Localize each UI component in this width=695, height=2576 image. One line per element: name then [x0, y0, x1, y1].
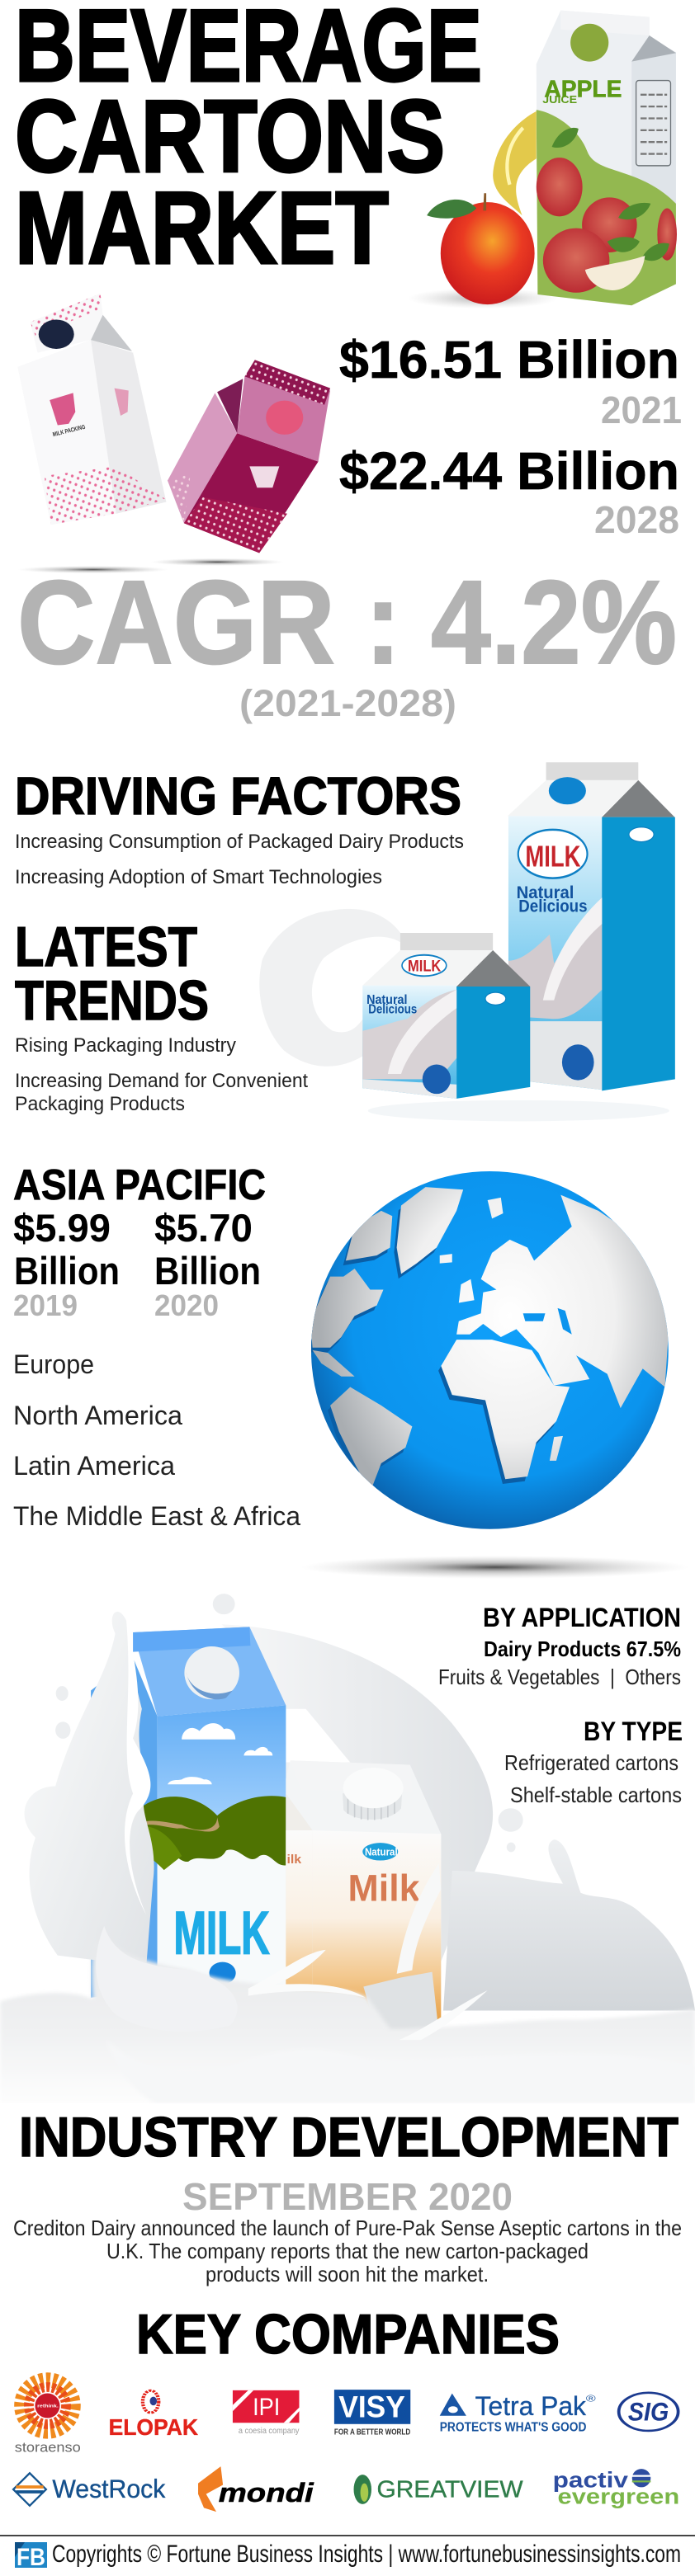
by application: [438, 1603, 681, 1689]
logo: IPI: a coesia company: [239, 2426, 299, 2435]
logo: SIG: [619, 2393, 678, 2431]
by type: [504, 1717, 683, 1807]
logo: Elopak: ELOPAK: [109, 2415, 198, 2441]
logo: Greatview: GREATVIEW: [376, 2476, 523, 2503]
value 2028: 2028: [594, 498, 679, 541]
logo: WestRock: WestRock: [52, 2475, 166, 2503]
asia pacific: [13, 1161, 266, 1322]
illustration: milk cartons in splash: [0, 1594, 695, 2103]
logo: Visy: FOR A BETTER WORLD: [334, 2428, 410, 2437]
logo: Tetra Pak: Tetra Pak: [475, 2390, 586, 2421]
illustration: milk cartons in splash: MILK: [174, 1899, 270, 1967]
value 2021: [339, 330, 682, 431]
latest trends: Rising Packaging Industry: [15, 1034, 236, 1057]
driving factors: Increasing Adoption of Smart Technologies: [15, 866, 382, 888]
driving factors: Increasing Consumption of Packaged Dairy Products: [15, 831, 464, 853]
logo: Stora Enso: [15, 2380, 81, 2455]
logo: Pactiv Evergreen: [553, 2468, 679, 2509]
driving factors: [15, 766, 464, 888]
logo: Stora Enso: storaenso: [15, 2441, 81, 2455]
latest trends: Increasing Demand for Convenient: [15, 1070, 308, 1092]
regions list: The Middle East & Africa: [13, 1501, 300, 1531]
illustration: apple juice carton: [408, 11, 677, 308]
value 2021: $16.51 Billion: [339, 330, 679, 389]
logo: WestRock: [13, 2473, 166, 2506]
globe shadow: [301, 1556, 689, 1579]
company logos: [13, 2380, 679, 2512]
illustration: milk cartons and splash: Natural: [517, 883, 574, 902]
driving factors: DRIVING FACTORS: [15, 766, 461, 826]
development text: products will soon hit the market.: [206, 2262, 489, 2286]
logo: SIG: SIG: [628, 2398, 669, 2427]
illustration: apple juice carton: JUICE: [542, 94, 577, 106]
illustration: white milk carton: [17, 294, 168, 573]
illustration: milk cartons and splash: MILK: [408, 957, 442, 975]
value 2020: Billion: [154, 1249, 261, 1293]
value 2028: $22.44 Billion: [339, 441, 679, 501]
logo: Elopak: [109, 2390, 198, 2441]
latest trends: [15, 916, 308, 1115]
title: [15, 0, 482, 285]
illustration: milk cartons and splash: Delicious: [368, 1002, 417, 1016]
regions list: Europe: [13, 1349, 94, 1379]
value 2019: $5.99: [13, 1206, 111, 1250]
illustration: milk cartons and splash: Natural: [366, 992, 408, 1006]
logo: Tetra Pak: ®: [586, 2393, 596, 2404]
logo: IPI: IPI: [253, 2393, 280, 2420]
logo: Greatview: [354, 2475, 523, 2504]
value 2020: [154, 1206, 261, 1322]
logo: Mondi: [198, 2466, 314, 2512]
title: CARTONS: [15, 80, 445, 194]
globe: [308, 1171, 669, 1529]
illustration: milk cartons and splash: Delicious: [518, 897, 588, 916]
latest trends: TRENDS: [15, 969, 209, 1032]
by type: Refrigerated cartons: [504, 1750, 678, 1775]
logo: IPI: [233, 2390, 299, 2435]
development text: U.K. The company reports that the new carton-packaged: [106, 2239, 589, 2263]
illustration: magenta milk carton: [151, 360, 330, 566]
illustration: white milk carton: MILK PACKING: [52, 422, 86, 438]
logo: Visy: [334, 2390, 410, 2437]
latest trends: LATEST: [15, 916, 197, 978]
footer rule: [0, 2535, 695, 2536]
logo: Mondi: mondi: [219, 2477, 314, 2508]
value 2028: [339, 441, 679, 541]
illustration: apple juice carton: APPLE: [544, 76, 622, 102]
regions list: Latin America: [13, 1451, 175, 1481]
development text: [13, 2216, 682, 2286]
asia pacific: ASIA PACIFIC: [13, 1161, 266, 1209]
logo: Pactiv Evergreen: pactiv: [553, 2468, 628, 2493]
value 2019: 2019: [13, 1288, 78, 1322]
title: MARKET: [15, 172, 389, 285]
illustration: milk cartons and splash: MILK: [525, 840, 581, 873]
date: SEPTEMBER 2020: [182, 2175, 513, 2218]
value 2019: Billion: [14, 1249, 120, 1293]
illustration: milk cartons and splash: [259, 762, 675, 1121]
illustration: milk cartons in splash: Milk: [348, 1867, 420, 1910]
by type: BY TYPE: [584, 1717, 683, 1746]
logo: Stora Enso: rethink.: [37, 2404, 59, 2409]
regions list: North America: [13, 1401, 182, 1430]
illustration: milk cartons in splash: Natural: [365, 1846, 398, 1858]
value 2020: $5.70: [154, 1206, 253, 1250]
logo: Tetra Pak: [440, 2390, 596, 2435]
latest trends: Packaging Products: [15, 1093, 185, 1115]
value 2019: [13, 1206, 120, 1322]
logo: Tetra Pak: PROTECTS WHAT'S GOOD: [440, 2421, 586, 2435]
regions list: [13, 1349, 300, 1531]
illustration: milk cartons in splash: ilk: [286, 1853, 302, 1867]
footer logo: FB: [17, 2544, 45, 2571]
logo: Visy: VISY: [338, 2390, 405, 2424]
key companies heading: KEY COMPANIES: [136, 2303, 560, 2366]
value 2021: 2021: [601, 389, 682, 431]
by type: Shelf-stable cartons: [510, 1782, 682, 1807]
CAGR: (2021-2028): [239, 682, 456, 724]
value 2020: 2020: [154, 1288, 219, 1322]
